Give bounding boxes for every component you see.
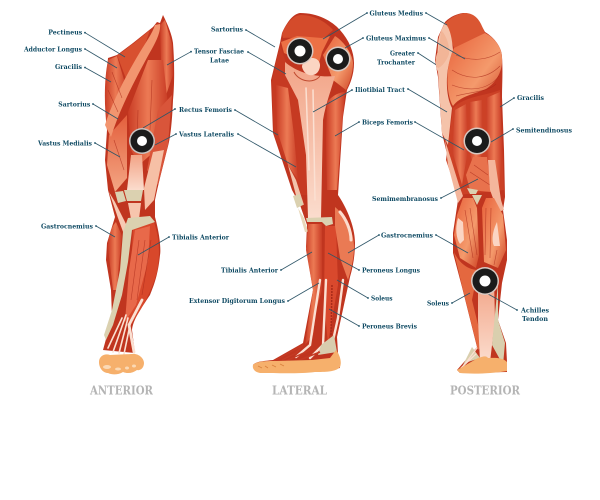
label: Sartorius (lateral): [211, 26, 275, 47]
marker: lateral hip rear: [326, 46, 350, 72]
label: Gluteus Medius (lateral): Gluteus Medius: [370, 10, 423, 18]
label: Biceps Femoris (lateral): [335, 118, 413, 136]
label: Gracilis: Gracilis: [55, 63, 82, 71]
label: Semitendinosus: [491, 126, 572, 142]
label: Vastus Medialis: Vastus Medialis: [37, 140, 92, 148]
label: Tibialis Anterior (lateral): Tibialis Anterior: [221, 266, 278, 274]
pointer: Gluteus Maximus (posterior): [428, 37, 465, 59]
label: Peroneus Brevis: [329, 309, 417, 330]
label: Gluteus Maximus (lateral): [345, 34, 426, 48]
label: Greater Trochanter: Greater: [390, 50, 415, 58]
label: Biceps Femoris (lateral): Biceps Femoris: [362, 118, 413, 126]
label: Tensor Fasciae Latae (anterior): Latae: [210, 56, 229, 64]
label: Vastus Medialis: [37, 140, 120, 157]
label: Tibialis Anterior (anterior): Tibialis Anterior: [172, 234, 229, 242]
label: Soleus (posterior): Soleus: [427, 300, 449, 308]
anterior leg muscles: [99, 15, 174, 374]
label: Semimembranosus: Semimembranosus: [372, 195, 438, 203]
label: Semitendinosus: Semitendinosus: [516, 126, 572, 134]
pointer: Tensor Fasciae Latae (lateral): [247, 51, 286, 74]
marker: posterior thigh: [464, 128, 490, 154]
figure: posterior leg: [372, 12, 572, 397]
posterior leg muscles: [435, 13, 507, 374]
label: Gastrocnemius (anterior): [41, 222, 115, 237]
marker: anterior thigh: [129, 128, 155, 154]
heading: LATERAL: LATERAL: [272, 382, 327, 398]
figure: lateral leg: [189, 10, 438, 398]
label: Rectus Femoris (anterior): [143, 106, 232, 128]
label: Gastrocnemius (anterior): Gastrocnemius: [41, 222, 93, 230]
label: Gluteus Maximus (lateral): Gluteus Maximus: [366, 34, 426, 42]
label: Sartorius (lateral): Sartorius: [211, 26, 243, 34]
label: Pectineus: [48, 28, 125, 57]
label: Iliotibial Tract (lateral): [313, 86, 406, 112]
label: Soleus (lateral): Soleus: [371, 294, 393, 302]
pointer: Vastus Lateralis (lateral): [237, 133, 296, 167]
pointer: Gluteus Medius (posterior): [425, 12, 447, 25]
heading: POSTERIOR: POSTERIOR: [450, 382, 520, 398]
label: Rectus Femoris (anterior): Rectus Femoris: [179, 106, 232, 114]
label: Semimembranosus: [372, 179, 478, 203]
label: Vastus Lateralis (anterior): Vastus Lateralis: [178, 130, 234, 138]
label: Adductor Longus: Adductor Longus: [23, 46, 82, 54]
label: Tibialis Anterior (anterior): [138, 234, 229, 255]
label: Extensor Digitorum Longus: Extensor Digitorum Longus: [189, 297, 285, 305]
label: Greater Trochanter: [377, 50, 438, 66]
label: Peroneus Longus: Peroneus Longus: [362, 266, 420, 274]
pointer: Rectus Femoris (lateral): [234, 109, 278, 135]
pointer: Gastrocnemius (posterior): [435, 234, 468, 253]
marker: lateral hip front: [286, 38, 314, 64]
label: Gluteus Medius (lateral): [323, 10, 423, 39]
marker: posterior calf: [471, 267, 499, 295]
label: Tibialis Anterior (lateral): [221, 252, 312, 274]
label: Extensor Digitorum Longus: [189, 283, 319, 305]
label: Tensor Fasciae Latae (anterior): [167, 48, 244, 65]
label: Peroneus Brevis: Peroneus Brevis: [362, 322, 417, 330]
label: Greater Trochanter: Trochanter: [377, 58, 415, 66]
label: Gracilis (posterior): [500, 94, 544, 107]
label: Vastus Lateralis (anterior): [155, 130, 234, 145]
label: Gastrocnemius (lateral): [348, 232, 433, 253]
pointer: Biceps Femoris (posterior): [414, 121, 464, 150]
label: Sartorius: Sartorius: [58, 100, 91, 108]
label: Peroneus Longus: [328, 253, 420, 274]
heading: ANTERIOR: ANTERIOR: [89, 382, 153, 398]
label: Achilles Tendon: Tendon: [522, 315, 548, 323]
label: Gracilis: [55, 63, 111, 82]
label: Soleus (lateral): [337, 280, 393, 302]
label: Achilles Tendon: Achilles: [520, 306, 549, 314]
label: Sartorius: [58, 100, 118, 119]
label: Tensor Fasciae Latae (anterior): Tensor Fasciae: [194, 48, 244, 56]
label: Iliotibial Tract (lateral): Iliotibial Tract: [355, 86, 406, 94]
label: Pectineus: Pectineus: [48, 28, 83, 36]
label: Adductor Longus: [23, 46, 117, 68]
label: Achilles Tendon: [488, 294, 549, 323]
lateral leg muscles: [253, 13, 355, 373]
label: Gracilis (posterior): Gracilis: [517, 94, 544, 102]
pointer: Iliotibial Tract (posterior): [407, 88, 447, 112]
figure: anterior leg: [23, 15, 244, 398]
label: Soleus (posterior): [427, 293, 470, 308]
label: Gastrocnemius (lateral): Gastrocnemius: [381, 232, 433, 240]
